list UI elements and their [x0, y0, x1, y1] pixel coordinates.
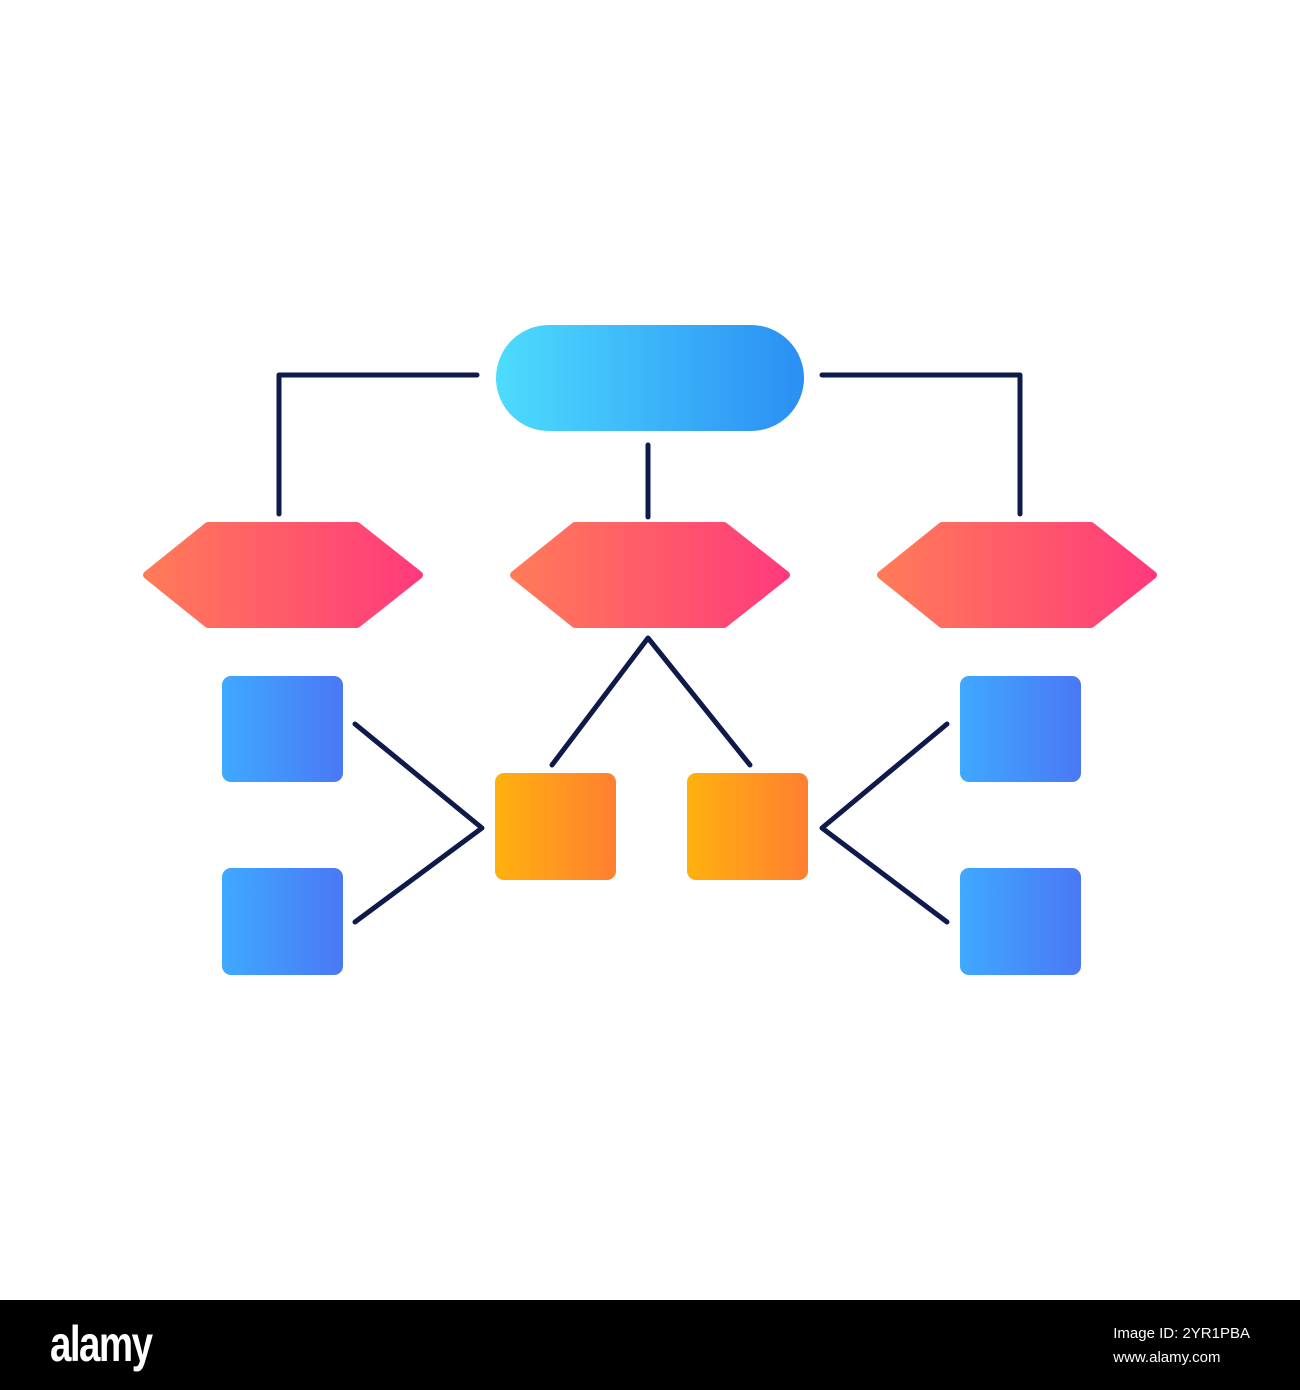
image id [1113, 1325, 1250, 1366]
image id: Image ID: 2YR1PBA [1113, 1325, 1250, 1342]
orange squares [495, 773, 808, 880]
connector lines [279, 375, 1020, 922]
top pill node [496, 325, 804, 431]
logo: alamy [50, 1316, 151, 1372]
blue squares [222, 676, 1081, 975]
hexagon nodes [147, 526, 1153, 624]
footer bar [0, 1300, 1300, 1390]
image id: www.alamy.com [1113, 1349, 1221, 1366]
